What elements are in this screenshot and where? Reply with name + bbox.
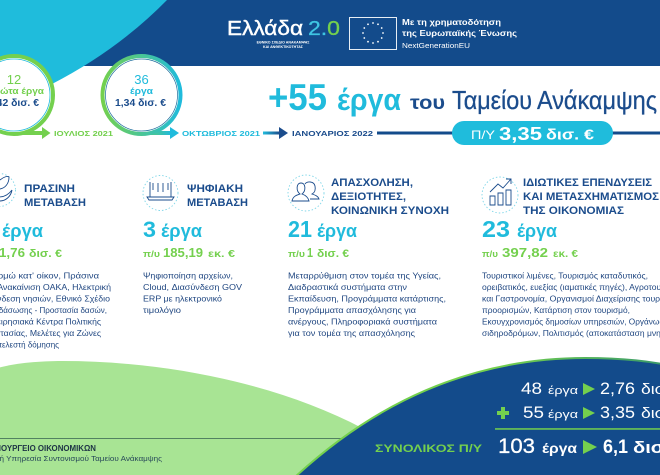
icon: leaves	[0, 174, 16, 206]
panel: green transition	[0, 174, 111, 350]
panel: employment and skills: δισ. €	[317, 248, 349, 260]
project list: Προγράμματα απασχόλησης για	[288, 306, 416, 315]
panel: employment and skills: ΚΟΙΝΩΝΙΚΗ ΣΥΝΟΧΗ	[331, 205, 449, 217]
panel: digital transition: 185,19	[163, 245, 203, 260]
green hill	[0, 361, 362, 475]
totals divider	[495, 428, 660, 430]
project list: Μεταρρύθμιση στον τομέα της Υγείας,	[288, 272, 441, 280]
timeline line	[377, 132, 660, 134]
panel: private investment: ΙΔΙΩΤΙΚΕΣ ΕΠΕΝΔΥΣΕΙΣ	[523, 177, 652, 189]
project list: προορισμών, Κατάρτιση στον τουρισμό,	[482, 306, 630, 315]
EU funding text: NextGenerationEU	[402, 41, 470, 50]
panel: digital transition: π/υ	[143, 249, 161, 260]
budget pill: δισ. €	[546, 126, 595, 144]
panel: employment and skills: 21	[288, 216, 312, 242]
totals: grand total: ΣΥΝΟΛΙΚΟΣ Π/Υ	[375, 443, 483, 455]
EU funding text	[402, 17, 518, 50]
milestone: January 2022	[263, 127, 373, 139]
panel: digital transition	[143, 176, 248, 315]
panel: employment and skills: έργα	[317, 221, 357, 241]
totals: first row: 48	[521, 379, 542, 398]
totals: first row: 2,76	[600, 379, 635, 398]
logo: Ελλάδα 2.0: Ελλάδα	[227, 18, 303, 40]
panel: digital transition: εκ. €	[208, 248, 235, 260]
panel: private investment: ΚΑΙ ΜΕΤΑΣΧΗΜΑΤΙΣΜΟΣ	[523, 191, 659, 203]
footer: ministry	[0, 444, 162, 463]
panel: private investment: 397,82	[502, 245, 548, 260]
icon: laptop	[143, 176, 178, 210]
logo: Ελλάδα 2.0: 2.0	[308, 18, 340, 40]
milestone: October 2021: 1,34 δισ. €	[115, 97, 166, 109]
project list	[143, 272, 243, 315]
panel: employment and skills: 1	[307, 245, 313, 260]
panel: green transition: ΜΕΤΑΒΑΣΗ	[24, 197, 86, 209]
panel: green transition: ΠΡΑΣΙΝΗ	[24, 183, 75, 195]
totals: grand total	[375, 435, 660, 458]
budget pill: 3,35	[499, 124, 542, 144]
panel: private investment: 23	[482, 216, 510, 242]
title	[268, 77, 657, 118]
totals: second row: έργα	[548, 409, 579, 421]
icon: EU flag	[350, 18, 396, 50]
budget pill: Π/Υ	[471, 128, 495, 142]
milestone: July 2021: ΙΟΥΛΙΟΣ 2021	[54, 129, 114, 138]
totals: second row: 3,35	[600, 403, 635, 422]
panel: private investment: ΤΗΣ ΟΙΚΟΝΟΜΙΑΣ	[523, 205, 624, 217]
icon: people	[288, 175, 324, 211]
totals: second row: 55	[523, 403, 544, 422]
project list	[288, 272, 446, 338]
icon: growth chart	[482, 177, 518, 213]
panel: digital transition: έργα	[161, 221, 202, 241]
panel: green transition: δισ. €	[29, 248, 62, 260]
totals: grand total: 103	[498, 435, 535, 458]
panel: employment and skills	[288, 175, 449, 338]
panel: private investment: έργα	[517, 221, 557, 241]
totals: first row	[521, 379, 660, 398]
title: έργα	[337, 82, 401, 117]
project list: τιμολόγιο	[143, 306, 182, 315]
milestone: July 2021	[0, 56, 114, 139]
project list: Διαδραστικά συστήματα στην	[288, 283, 407, 292]
title: του	[410, 93, 445, 114]
panel: employment and skills: ΑΠΑΣΧΟΛΗΣΗ,	[331, 177, 413, 189]
project list: Εκσυγχρονισμός δημοσίων υπηρεσιών, Οργάνωση	[482, 318, 660, 326]
project list: Εκπαίδευση, Προγράμματα κατάρτισης,	[288, 294, 446, 304]
footer rule	[0, 437, 342, 440]
EU funding text: της Ευρωπαϊκής Ένωσης	[402, 28, 518, 38]
milestone: October 2021: έργα	[130, 86, 153, 97]
project list: Cloud, Διασύνδεση GOV	[143, 283, 243, 292]
totals: grand total: 6,1	[603, 437, 628, 458]
title: +55	[268, 77, 327, 118]
project list: Ψηφιοποίηση αρχείων,	[143, 272, 233, 280]
project list	[0, 272, 111, 350]
milestone: January 2022: ΙΑΝΟΥΑΡΙΟΣ 2022	[292, 129, 373, 138]
panel: digital transition: 3	[143, 217, 156, 242]
navy hill	[295, 358, 660, 475]
milestone: July 2021: 12	[7, 72, 21, 87]
header band	[0, 0, 660, 102]
project list	[482, 272, 660, 338]
totals: second row	[497, 403, 660, 422]
panel: employment and skills: π/υ	[288, 249, 306, 260]
budget pill	[452, 121, 613, 145]
icon: plus	[497, 407, 509, 419]
project list: ERP με ηλεκτρονικό	[143, 294, 223, 304]
panel: digital transition: ΨΗΦΙΑΚΗ	[187, 183, 243, 195]
EU funding text: Με τη χρηματοδότηση	[402, 17, 501, 27]
milestone: October 2021: ΟΚΤΩΒΡΙΟΣ 2021	[182, 129, 261, 138]
logo: Ελλάδα 2.0: ΕΘΝΙΚΟ ΣΧΕΔΙΟ ΑΝΑΚΑΜΨΗΣ	[257, 40, 310, 44]
panel: private investment: εκ. €	[553, 248, 578, 260]
logo: Ελλάδα 2.0: ΚΑΙ ΑΝΘΕΚΤΙΚΟΤΗΤΑΣ	[263, 45, 304, 49]
totals: first row: έργα	[548, 385, 579, 397]
panel: employment and skills: ΔΕΞΙΟΤΗΤΕΣ,	[331, 191, 406, 203]
panel: digital transition: ΜΕΤΑΒΑΣΗ	[187, 197, 248, 209]
project list: ανέργους, Πληροφοριακά συστήματα	[288, 318, 437, 326]
panel: green transition: έργα	[2, 221, 43, 241]
project list: για τον τομέα της απασχόλησης	[288, 329, 415, 338]
totals: grand total: έργα	[542, 440, 577, 456]
panel: private investment	[482, 177, 660, 338]
milestone: October 2021: 36	[134, 72, 149, 87]
title: Ταμείου	[452, 85, 532, 115]
logo: Ελλάδα 2.0	[227, 18, 340, 49]
panel: private investment: π/υ	[482, 249, 498, 260]
project list: Τουριστικοί λιμένες, Τουρισμός καταδυτικός,	[482, 272, 648, 280]
milestone: October 2021	[102, 56, 261, 139]
